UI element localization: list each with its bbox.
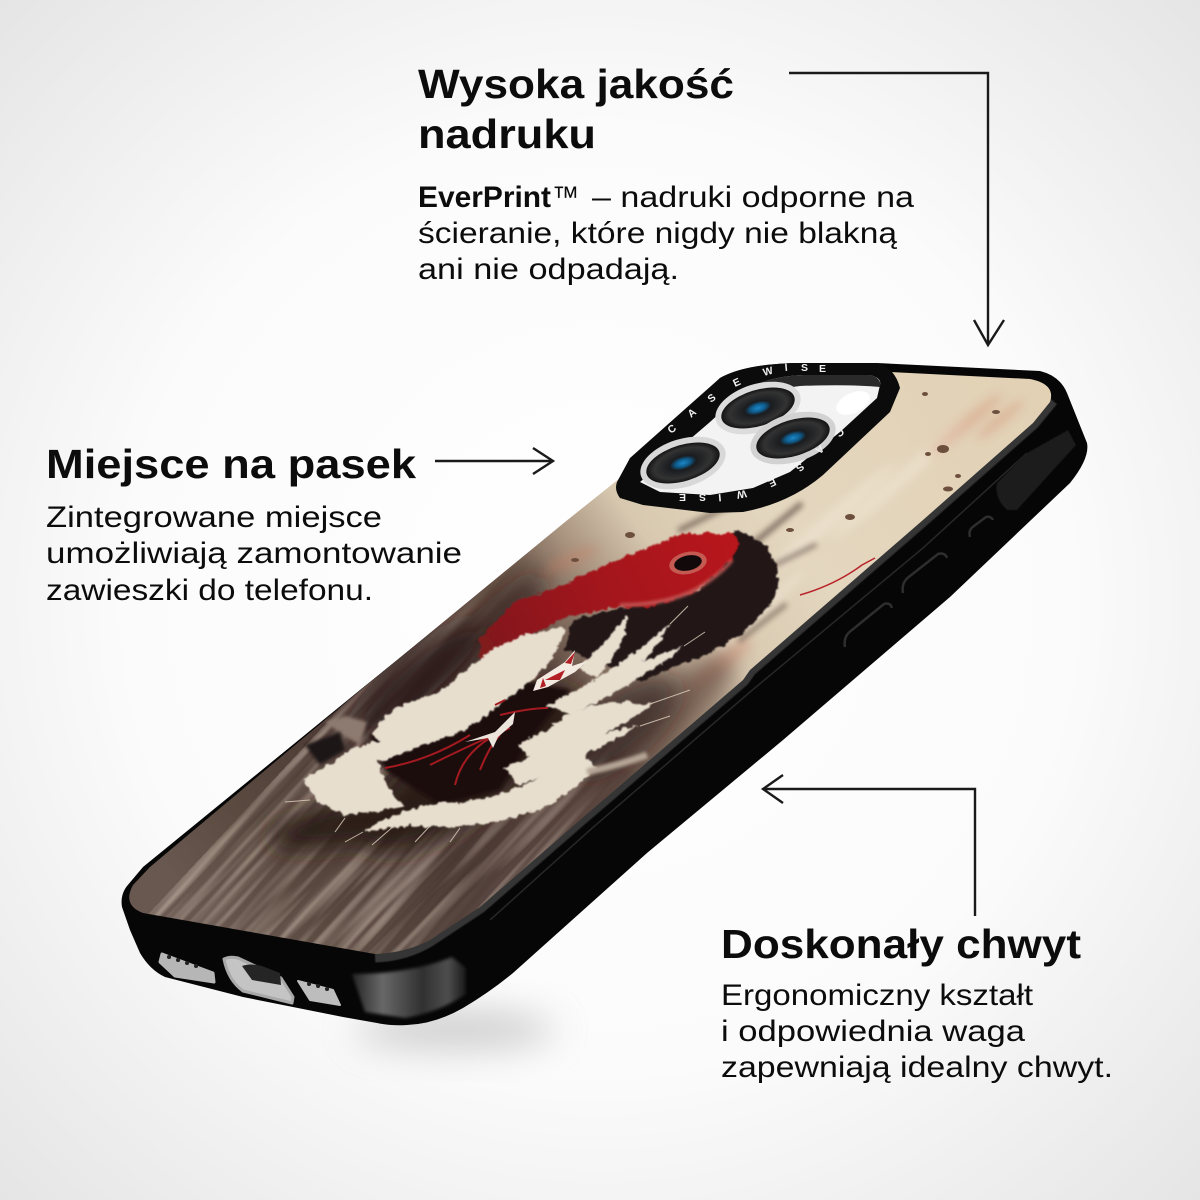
white blade: [465, 712, 515, 748]
lens right: [744, 402, 842, 474]
red thin stroke: [800, 558, 875, 595]
charging port: [224, 957, 293, 1003]
feather stack: [504, 726, 638, 785]
callout: grip: [721, 775, 1113, 1084]
heading: nadruku: [418, 111, 596, 157]
lens left: [634, 427, 732, 499]
upper volume button: [903, 554, 947, 593]
dark splash rays: [680, 505, 815, 640]
lens top: [709, 372, 807, 444]
paint specks: [571, 392, 1000, 562]
red accents in the dark centre: [385, 700, 548, 785]
ring brand text top: CASEWISE: [665, 362, 826, 436]
dark clouds: [263, 569, 693, 881]
body text: zapewniają idealny chwyt.: [721, 1051, 1113, 1084]
fox mask: [533, 650, 587, 691]
brown transition wash: [466, 550, 746, 752]
wing top-left: [372, 628, 565, 752]
arrow to strap slot: [435, 448, 553, 474]
lower volume button: [845, 604, 892, 647]
body text: i odpowiednia waga: [721, 1015, 1025, 1048]
dim feather: [587, 755, 647, 772]
cream soft streaks: [729, 431, 954, 642]
wood streaks: [148, 584, 607, 954]
callout: print quality: [418, 61, 1004, 345]
dark centre: [370, 680, 570, 805]
body text: – nadruki odporne na: [592, 181, 914, 214]
action button: [996, 430, 1076, 510]
left claw: [302, 740, 420, 818]
body text: EverPrint: [418, 181, 551, 214]
fine feather hairs: [285, 606, 705, 845]
phone case: [122, 363, 1088, 1026]
body text: ™: [552, 181, 579, 214]
heading: Wysoka jakość: [418, 61, 734, 107]
reddish stains: [546, 394, 1022, 674]
body text: Ergonomiczny kształt: [721, 979, 1034, 1012]
fish eye ring: [669, 552, 707, 574]
body text: umożliwiają zamontowanie: [46, 537, 462, 570]
small pink rock: [325, 716, 367, 745]
artwork base: [120, 360, 1070, 960]
flash: [832, 386, 874, 420]
dark patch under rock: [305, 732, 345, 765]
body text: ani nie odpadają.: [418, 253, 679, 286]
side edge sheen: [375, 400, 1052, 956]
fish eye: [674, 555, 702, 571]
case body: [122, 363, 1087, 1025]
side small button: [970, 517, 993, 537]
fish pale belly: [620, 560, 732, 605]
body text: zawieszki do telefonu.: [46, 574, 373, 607]
print artwork: [129, 372, 1052, 954]
body text: Zintegrowane miejsce: [46, 501, 382, 534]
heading: Miejsce na pasek: [46, 441, 416, 487]
window top bevel: [745, 375, 880, 390]
dark blob behind fish: [565, 530, 778, 682]
bump frame: [616, 363, 900, 513]
phone shadow: [355, 1010, 555, 1050]
ring brand text bottom: CASEWISE: [679, 425, 846, 503]
white feathers: [303, 616, 684, 832]
arrow to phone top: [789, 73, 1004, 345]
side groove: [490, 453, 1027, 920]
bottom corner highlight: [352, 957, 466, 1018]
arrow to phone side: [763, 775, 975, 916]
glass window: [640, 375, 880, 495]
lower arc: [364, 754, 598, 833]
speaker left: [160, 954, 214, 982]
body text: ścieranie, które nigdy nie blakną: [418, 217, 897, 250]
callout: strap slot: [46, 441, 553, 607]
heading: Doskonały chwyt: [721, 921, 1081, 967]
camera bump: [616, 362, 900, 513]
red fish: [480, 533, 740, 667]
speaker right: [298, 981, 340, 1005]
